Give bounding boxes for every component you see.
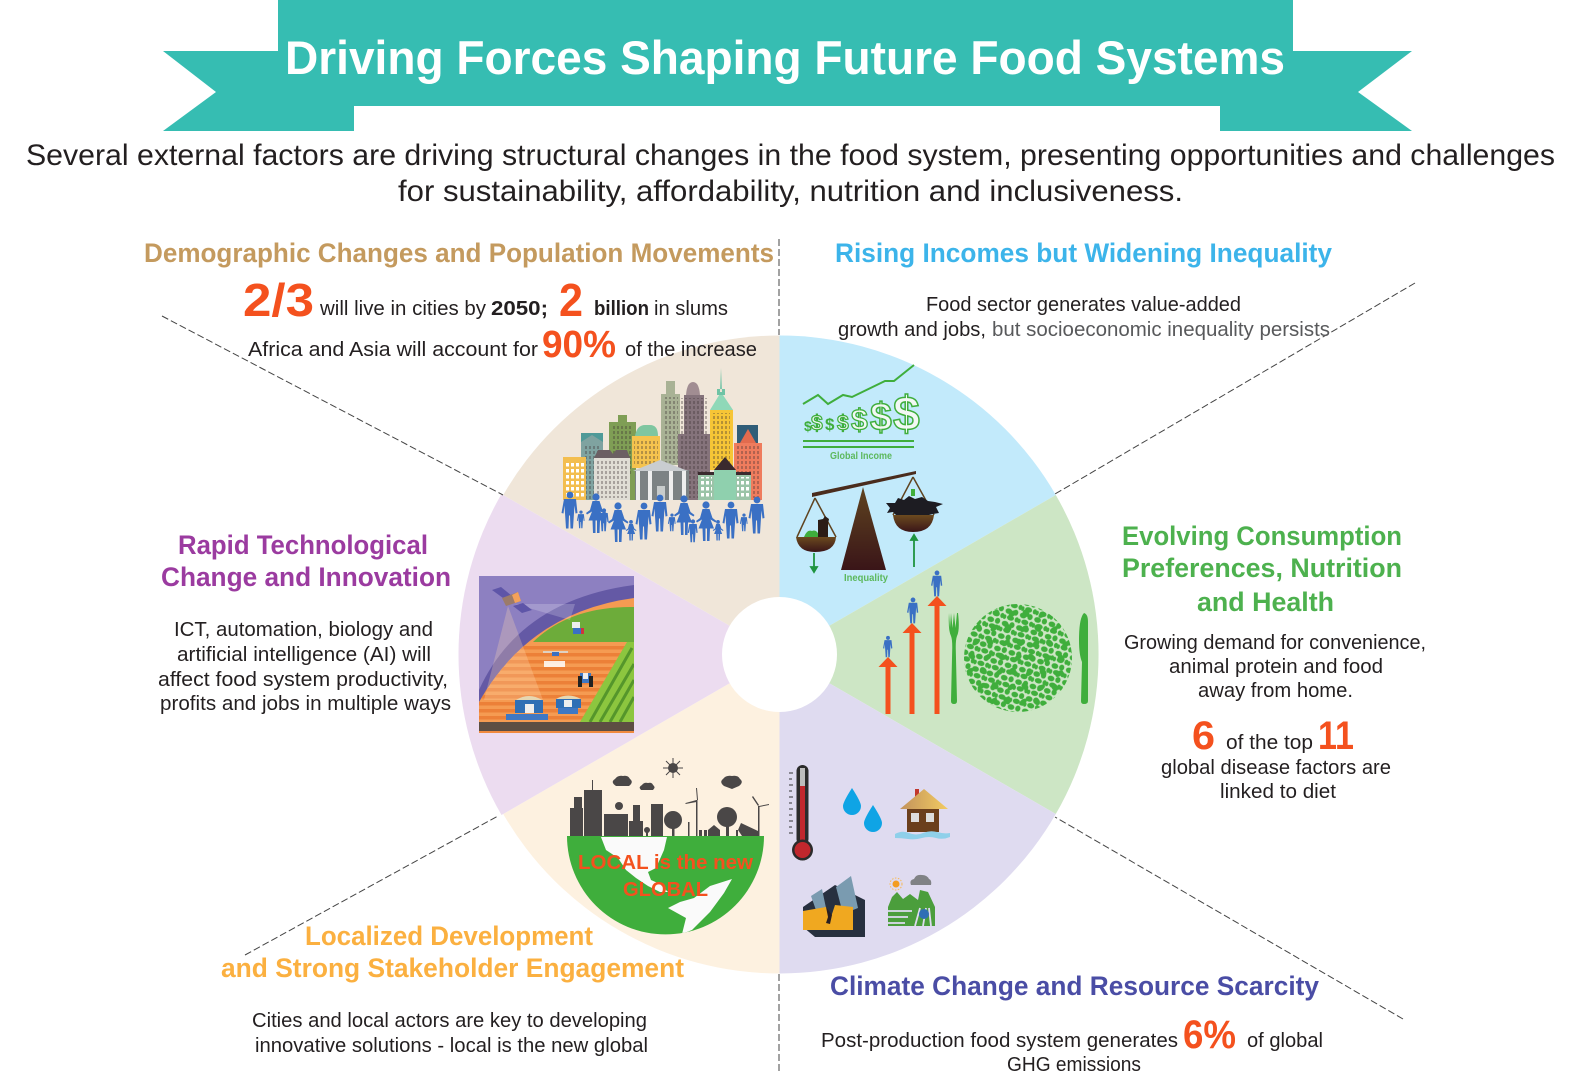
right pan — [886, 477, 943, 532]
stat: 6 percent GHG — [821, 1013, 1323, 1076]
globe — [567, 836, 764, 934]
left pan — [796, 498, 836, 552]
body: technology: affect food system productivity, — [158, 669, 448, 691]
stat: 6 of the top 11: 11 — [1318, 714, 1354, 758]
stat: 2/3 in cities — [243, 274, 728, 326]
icon: plate of food with cutlery — [949, 604, 1088, 712]
people — [562, 492, 764, 542]
body: rising incomes: but socioeconomic inequality persists — [992, 319, 1330, 341]
driving forces wheel — [458, 335, 1099, 973]
stat: 90 percent: 90% — [542, 324, 616, 366]
heading: technology: Change and Innovation — [161, 562, 451, 592]
ground — [479, 722, 634, 731]
body: rising incomes — [838, 294, 1330, 341]
icon: city skyline and people — [562, 368, 764, 542]
sky — [479, 576, 634, 690]
heading: technology — [161, 530, 451, 592]
heading: climate: Climate Change and Resource Scarcity — [830, 971, 1319, 1001]
subtitle — [26, 139, 1555, 208]
panel: demographic changes text — [144, 238, 774, 366]
icon: flooded house — [895, 789, 950, 839]
icon: rising arrows with people — [878, 571, 946, 714]
icon: water drops — [843, 788, 882, 832]
subtitle: Several external factors are driving structural changes in the food system, presenting opportunities and challenges — [26, 139, 1555, 172]
stat: 2/3 in cities: in slums — [654, 298, 728, 320]
field — [479, 598, 634, 733]
icon: local globe with skyline — [567, 758, 769, 934]
heading: localized development: Localized Development — [305, 921, 593, 951]
arrows — [878, 596, 946, 714]
stat: 2/3 in cities: 2/3 — [243, 274, 314, 326]
title: Driving Forces Shaping Future Food Systems — [285, 31, 1285, 84]
stat: 2/3 in cities: 2050; — [491, 298, 548, 320]
heading: consumption: and Health — [1197, 587, 1334, 617]
panel: climate text — [821, 971, 1323, 1076]
arrow: up — [911, 535, 917, 567]
heading: localized development: and Strong Stakeholder Engagement — [221, 953, 684, 983]
body: localized development — [252, 1010, 648, 1057]
stat: 6 percent GHG: Post-production food system generates — [821, 1030, 1178, 1052]
subtitle: for sustainability, affordability, nutrition and inclusiveness. — [398, 175, 1183, 208]
scale fulcrum — [841, 487, 886, 570]
stat: 2/3 in cities: billion — [594, 298, 649, 320]
title banner — [163, 0, 1412, 131]
panel: consumption text — [1122, 521, 1426, 803]
stat: 90 percent: Africa and Asia will account for — [248, 339, 538, 361]
stat: 6 of the top 11: 6 — [1192, 714, 1215, 758]
icon: landslide — [888, 875, 935, 926]
drones and machines — [506, 622, 593, 720]
heading: consumption: Evolving Consumption — [1122, 521, 1402, 551]
body: technology — [158, 619, 451, 715]
dollar signs: $ — [804, 418, 812, 434]
arrow: down — [811, 553, 817, 572]
body: technology: profits and jobs in multiple ways — [160, 693, 451, 715]
heading: demographic changes: Demographic Changes and Population Movements — [144, 238, 774, 268]
stat: 6 of the top 11: global disease factors are — [1161, 757, 1391, 779]
heading: technology: Rapid Technological — [178, 530, 428, 560]
body: consumption: animal protein and food — [1169, 656, 1383, 678]
fork — [949, 613, 959, 704]
dollar signs: $ — [837, 412, 849, 435]
label: local is the new global: LOCAL is the new — [578, 852, 753, 874]
body: technology: ICT, automation, biology and — [174, 619, 433, 641]
icon: earthquake — [803, 876, 865, 937]
label: local is the new global — [578, 852, 753, 901]
body: consumption: Growing demand for convenience, — [1124, 632, 1426, 654]
dollar signs: $ — [825, 415, 835, 434]
body: rising incomes: growth and jobs, — [838, 319, 986, 341]
label: global income: Global Income — [830, 451, 892, 462]
stat: 2/3 in cities: 2 — [559, 274, 583, 326]
dollar signs: $ — [811, 412, 823, 435]
body: localized development: innovative solutions - local is the new global — [255, 1035, 648, 1057]
people on arrows — [883, 571, 942, 657]
scale beam — [812, 471, 916, 497]
dollar signs: $ — [870, 396, 892, 439]
stat: 6 percent GHG: 6% — [1183, 1013, 1236, 1057]
dollar signs: $ — [893, 388, 920, 441]
stat: 90 percent — [248, 324, 757, 366]
stat: 90 percent: of the increase — [625, 339, 757, 361]
heading: consumption — [1122, 521, 1402, 617]
icon: inequality scale — [796, 471, 943, 584]
panel: localized development text — [221, 921, 684, 1057]
heading: localized development — [221, 921, 684, 983]
panel: technology text — [158, 530, 451, 715]
stat: 2/3 in cities: will live in cities by — [319, 298, 486, 320]
stat: 6 of the top 11 — [1161, 714, 1391, 803]
stat: 6 of the top 11: linked to diet — [1220, 781, 1336, 803]
continents — [601, 837, 732, 934]
label: local is the new global: GLOBAL — [623, 879, 708, 901]
body: consumption: away from home. — [1198, 680, 1353, 702]
food plate — [964, 604, 1072, 712]
skyline — [570, 758, 769, 836]
knife — [1079, 613, 1088, 704]
dollar signs: $ — [851, 404, 868, 437]
dollar signs — [804, 388, 920, 441]
icon: precision farming scene — [479, 576, 634, 733]
body: consumption — [1124, 632, 1426, 702]
icon: thermometer — [789, 765, 813, 860]
body: localized development: Cities and local actors are key to developing — [252, 1010, 647, 1032]
stat: 6 percent GHG: GHG emissions — [1007, 1054, 1141, 1076]
satellite and beams — [484, 587, 575, 700]
heading: consumption: Preferences, Nutrition — [1122, 553, 1402, 583]
income line — [803, 365, 914, 404]
body: technology: artificial intelligence (AI) will — [177, 644, 431, 666]
icon: global income chart — [803, 365, 920, 462]
panel: rising incomes text — [835, 238, 1332, 341]
stat: 6 of the top 11: of the top — [1226, 732, 1313, 754]
body: rising incomes: Food sector generates value-added — [926, 294, 1241, 316]
label: inequality: Inequality — [844, 573, 888, 584]
stat: 6 percent GHG: of global — [1247, 1030, 1323, 1052]
city buildings — [563, 368, 762, 500]
heading: rising incomes: Rising Incomes but Widening Inequality — [835, 238, 1332, 268]
